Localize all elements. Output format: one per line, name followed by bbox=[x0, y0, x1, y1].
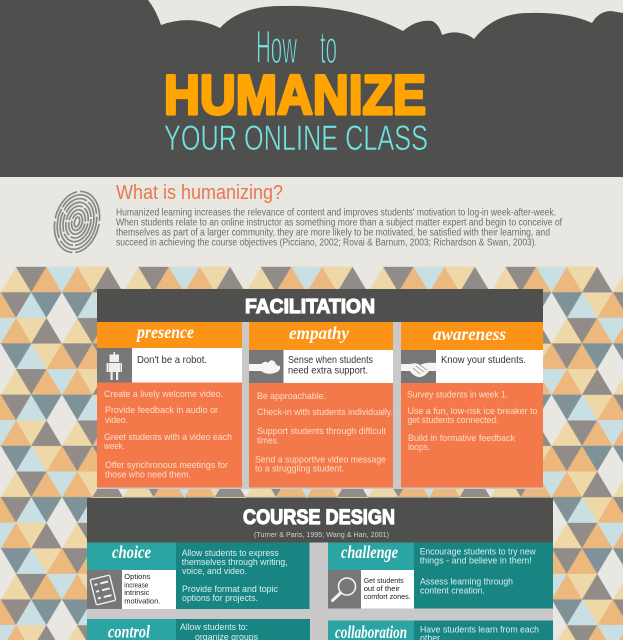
triangle pattern background bbox=[0, 267, 623, 640]
card: collaboration bbox=[328, 620, 553, 640]
title line: HUMANIZE: HUMANIZE bbox=[164, 63, 426, 126]
label: challenge: challenge bbox=[341, 542, 398, 562]
what is humanizing section bbox=[116, 182, 562, 248]
note: get students out of their comfort zones: comfort zones. bbox=[364, 592, 411, 601]
heading: FACILITATION: FACILITATION bbox=[245, 295, 375, 318]
course design header bar bbox=[87, 498, 553, 542]
challenge tips bbox=[420, 546, 536, 596]
note: get students out of their comfort zones bbox=[364, 576, 411, 601]
card: control bbox=[87, 619, 310, 640]
card: choice bbox=[87, 542, 310, 609]
awareness tips: Use a fun, low-risk ice breaker to bbox=[408, 405, 538, 416]
note: get students out of their comfort zones: out of their bbox=[364, 584, 400, 593]
note: get students out of their comfort zones: Get students bbox=[364, 576, 404, 585]
label: presence: presence bbox=[135, 322, 194, 342]
tagline: sense when students need support: need extra support. bbox=[288, 364, 368, 376]
collaboration tips bbox=[420, 624, 539, 640]
choice tips: Provide format and topic bbox=[182, 583, 278, 594]
tagline: sense when students need support bbox=[288, 354, 373, 376]
empathy tips bbox=[255, 390, 393, 474]
icon: hand holding heart bbox=[249, 360, 280, 374]
empathy tips: to a struggling student. bbox=[255, 462, 344, 474]
challenge tips: content creation. bbox=[420, 584, 485, 596]
title line: How to: How bbox=[256, 21, 297, 73]
choice tips: Allow students to express bbox=[182, 547, 279, 558]
presence tips: Create a lively welcome video. bbox=[104, 388, 223, 399]
panel: course design bbox=[87, 498, 553, 640]
title line: YOUR ONLINE CLASS: YOUR ONLINE CLASS bbox=[164, 119, 428, 158]
presence tips: video. bbox=[105, 414, 128, 425]
challenge tips: Assess learning through bbox=[420, 576, 513, 586]
column: presence bbox=[97, 322, 242, 488]
icon: robot bbox=[106, 352, 122, 380]
awareness tips: get students connected. bbox=[408, 414, 498, 425]
presence tips: Greet students with a video each bbox=[104, 431, 232, 442]
label: empathy: empathy bbox=[289, 323, 350, 343]
card: challenge bbox=[328, 542, 553, 608]
presence tips: week. bbox=[103, 440, 125, 451]
heading: What is humanizing?: What is humanizing? bbox=[116, 182, 283, 204]
paragraph: themselves as part of a larger community, they are more likely to be motivated, be satisfied with their learning, and bbox=[116, 228, 550, 238]
header cloud banner bbox=[0, 0, 623, 177]
title bbox=[164, 21, 428, 158]
empathy tips: times. bbox=[257, 434, 279, 446]
tagline: sense when students need support: Sense when students bbox=[288, 354, 373, 366]
label: choice: choice bbox=[112, 542, 151, 562]
column: awareness bbox=[401, 322, 543, 488]
label: awareness: awareness bbox=[433, 324, 506, 344]
tagline: Don't be a robot: Don't be a robot. bbox=[137, 354, 207, 366]
collaboration tips: Have students learn from each bbox=[420, 624, 539, 634]
facilitation header bar bbox=[97, 289, 543, 322]
control tips: Allow students to: bbox=[180, 621, 248, 632]
awareness tips: Build in formative feedback bbox=[408, 432, 515, 443]
presence tips: those who need them. bbox=[105, 468, 191, 480]
icon: checklist bbox=[90, 575, 116, 605]
paragraph: When students relate to an online instructor as something more than a subject matter expert and begin to conceive of bbox=[116, 218, 562, 228]
note: options increase intrinsic motivation: increase bbox=[124, 580, 148, 590]
note: options increase intrinsic motivation: intrinsic bbox=[124, 588, 149, 597]
choice tips: voice, and video. bbox=[182, 565, 247, 576]
awareness tips: loops. bbox=[408, 441, 430, 452]
challenge tips: Encourage students to try new bbox=[420, 546, 536, 556]
citation: (Turner & Paris, 1995; Wang & Han, 2001) bbox=[254, 530, 389, 539]
choice tips: themselves through writing, bbox=[182, 556, 288, 567]
tagline: know your students: Know your students. bbox=[441, 354, 526, 366]
empathy tips: Support students through difficult bbox=[257, 425, 386, 436]
icon: handshake bbox=[401, 363, 436, 377]
empathy tips: Be approachable. bbox=[257, 390, 326, 401]
choice tips bbox=[182, 547, 288, 603]
choice tips: options for projects. bbox=[182, 592, 258, 603]
empathy tips: Send a supportive video message bbox=[255, 454, 386, 464]
icon: magnifier bbox=[332, 578, 356, 600]
control tips bbox=[180, 621, 258, 640]
heading: COURSE DESIGN: COURSE DESIGN bbox=[243, 505, 395, 529]
empathy tips: Check-in with students individually. bbox=[257, 406, 393, 417]
note: options increase intrinsic motivation: motivation. bbox=[124, 596, 160, 606]
panel: facilitation bbox=[97, 289, 543, 489]
icon: fingerprint bbox=[48, 187, 106, 257]
paragraph: succeed in achieving the course objectives (Picciano, 2002; Rovai & Barnum, 2003; Richardson & Swan, 2003). bbox=[116, 238, 537, 248]
awareness tips: Survey students in week 1. bbox=[407, 388, 508, 400]
note: options increase intrinsic motivation: Options bbox=[124, 572, 150, 581]
paragraph: Humanized learning increases the relevance of content and improves students' motivation to log-in week-after-week. bbox=[116, 208, 556, 218]
presence tips bbox=[103, 388, 232, 480]
presence tips: Provide feedback in audio or bbox=[105, 404, 218, 415]
title: to bbox=[320, 21, 337, 73]
challenge tips: things - and believe in them! bbox=[420, 554, 532, 566]
awareness tips bbox=[407, 388, 538, 452]
presence tips: Offer synchronous meetings for bbox=[105, 459, 228, 470]
note: options increase intrinsic motivation bbox=[124, 572, 160, 606]
paragraph bbox=[116, 208, 562, 248]
column: empathy bbox=[249, 322, 393, 488]
